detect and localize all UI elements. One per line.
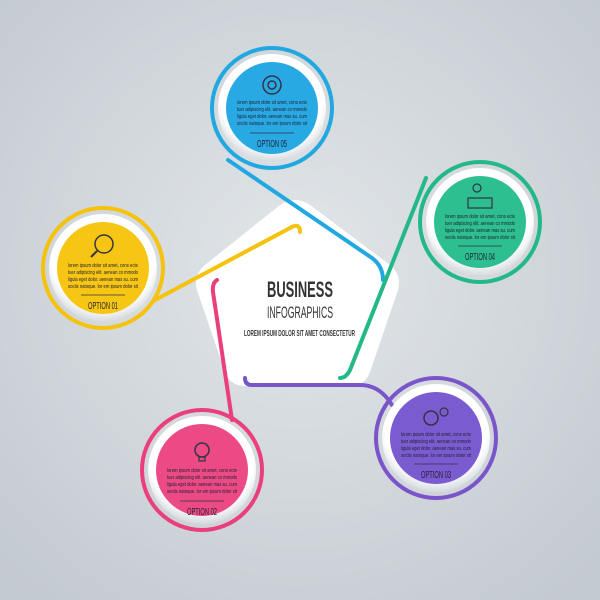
option 05 circle [212,48,332,168]
option 05 circle: sociis natoque. lor em ipsum dolor sit [237,121,308,127]
connector lines [155,160,426,420]
option 01 circle: OPTION 01 [88,301,118,312]
option 02 circle: OPTION 02 [187,507,217,518]
option 04 circle: lorem ipsum dolor sit amet, cons ecte [445,214,515,220]
option 03 circle: tuer adipiscing elit. aenean co mmodo [401,439,471,445]
option 02 circle: lorem ipsum dolor sit amet, cons ecte [167,468,237,474]
option 03 circle: lorem ipsum dolor sit amet, cons ecte [401,432,471,438]
title block [244,277,355,338]
option 02 circle: ligula eget dolor. aenean mas su. cum [167,482,237,488]
option 05 circle: lorem ipsum dolor sit amet, cons ecte [237,100,307,106]
option 03 circle: OPTION 03 [421,470,451,481]
option 01 circle: tuer adipiscing elit. aenean co mmodo [68,270,138,276]
option 05 circle: OPTION 05 [257,139,287,150]
option 04 circle: OPTION 04 [465,252,495,263]
option 01 circle: sociis natoque. lor em ipsum dolor sit [68,284,139,290]
option 02 circle [142,410,262,530]
title block: BUSINESS [267,277,333,302]
option 05 circle: ligula eget dolor. aenean mas su. cum [237,114,307,120]
option 04 circle [420,162,540,282]
title block: LOREM IPSUM DOLOR SIT AMET CONSECTETUR [244,329,355,338]
option 02 circle: tuer adipiscing elit. aenean co mmodo [167,475,237,481]
option 01 circle: ligula eget dolor. aenean mas su. cum [68,277,138,283]
option 03 circle [376,378,496,498]
option 03 circle: sociis natoque. lor em ipsum dolor sit [401,453,472,459]
option 04 circle: ligula eget dolor. aenean mas su. cum [445,228,515,234]
option 03 circle: ligula eget dolor. aenean mas su. cum [401,446,471,452]
option 01 circle: lorem ipsum dolor sit amet, cons ecte [68,263,138,269]
option 04 circle: tuer adipiscing elit. aenean co mmodo [445,221,515,227]
option 04 circle: sociis natoque. lor em ipsum dolor sit [445,235,516,241]
title block: INFOGRAPHICS [267,303,333,322]
option 02 circle: sociis natoque. lor em ipsum dolor sit [167,489,238,495]
option 01 circle [43,208,163,328]
pentagon [196,200,399,386]
option 05 circle: tuer adipiscing elit. aenean co mmodo [237,107,307,113]
